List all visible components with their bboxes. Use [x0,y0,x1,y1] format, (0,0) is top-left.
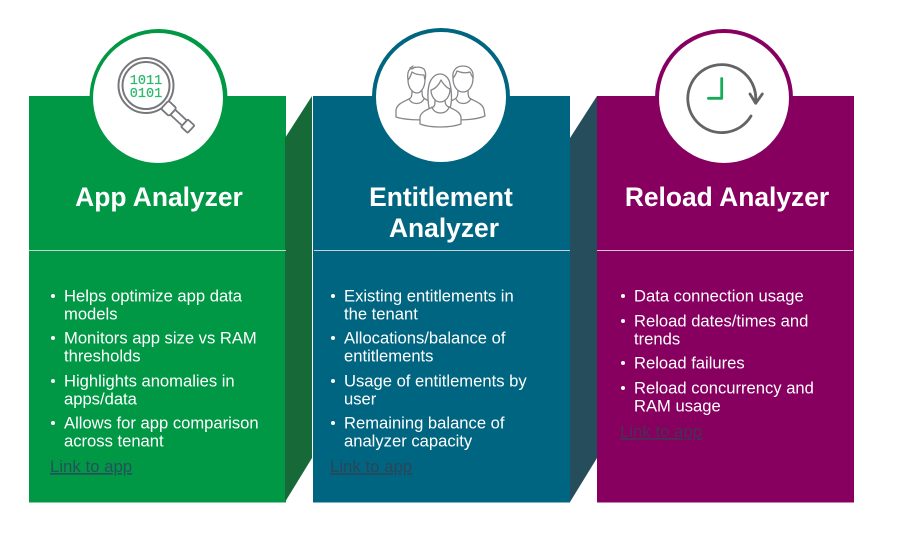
bullet list: Entitlement Analyzer: the tenant [344,304,418,324]
heading: Reload Analyzer: Reload Analyzer [625,182,829,212]
teal circle badge [376,32,506,162]
panel: Reload Analyzer [597,29,854,502]
icon: magnifying glass with binary: 0101 [130,87,162,102]
link: Entitlement Analyzer: Link to app [330,457,412,476]
bullet list: Entitlement Analyzer: Remaining balance of [344,414,505,432]
bullet list: Entitlement Analyzer: Existing entitlements in [344,286,514,306]
heading: Entitlement Analyzer [369,182,513,243]
icon: magnifying glass with binary: 1011 [130,74,162,89]
heading: Entitlement Analyzer: Entitlement [369,182,513,212]
panel: App Analyzer [29,29,312,502]
bullet list: App Analyzer: Highlights anomalies in [64,372,235,390]
bullet list: App Analyzer: Monitors app size vs RAM [64,328,257,348]
purple circle ring [655,29,793,167]
bullet list: Entitlement Analyzer: analyzer capacity [344,432,473,450]
bullet list: App Analyzer: apps/data [64,390,138,408]
purple circle badge [659,33,789,163]
bullet list: Reload Analyzer: Data connection usage [634,286,804,306]
bullet list: App Analyzer: thresholds [64,346,141,366]
bullet list: App Analyzer [51,286,259,450]
teal fold connector [570,96,597,502]
link: App Analyzer: Link to app [50,457,132,476]
link: Reload Analyzer: Link to app [620,422,702,441]
bullet list: Reload Analyzer: trends [634,330,680,348]
bullet list: Entitlement Analyzer: Allocations/balance of [344,328,506,348]
bullet list: App Analyzer: Helps optimize app data [64,286,243,306]
bullet list: Entitlement Analyzer: entitlements [344,346,433,366]
heading: Entitlement Analyzer: Analyzer [389,213,499,243]
icon: clock with reload arrow [688,65,762,133]
panel: Entitlement Analyzer [313,28,597,502]
green panel background [29,96,286,502]
bullet list: Entitlement Analyzer: Usage of entitlements by [344,372,527,390]
bullet list: Reload Analyzer: RAM usage [634,396,721,416]
bullet list: Entitlement Analyzer: user [344,390,377,408]
green fold connector [285,96,312,502]
teal circle ring [372,28,510,166]
icon: magnifying glass with binary [118,58,195,133]
purple panel background [597,96,854,502]
bullet list: App Analyzer: Allows for app comparison [64,414,259,432]
bullet list: App Analyzer: models [64,304,118,324]
icon: group of people [396,66,485,127]
heading: App Analyzer: App Analyzer [75,182,243,212]
green circle ring [90,29,228,167]
teal panel background [313,96,570,502]
green circle badge [93,33,223,163]
bullet list: Reload Analyzer: Reload dates/times and [634,312,808,330]
bullet list: Entitlement Analyzer [331,286,527,450]
bullet list: App Analyzer: across tenant [64,432,164,450]
bullet list: Reload Analyzer [621,286,814,416]
bullet list: Reload Analyzer: Reload concurrency and [634,378,814,398]
bullet list: Reload Analyzer: Reload failures [634,354,745,372]
